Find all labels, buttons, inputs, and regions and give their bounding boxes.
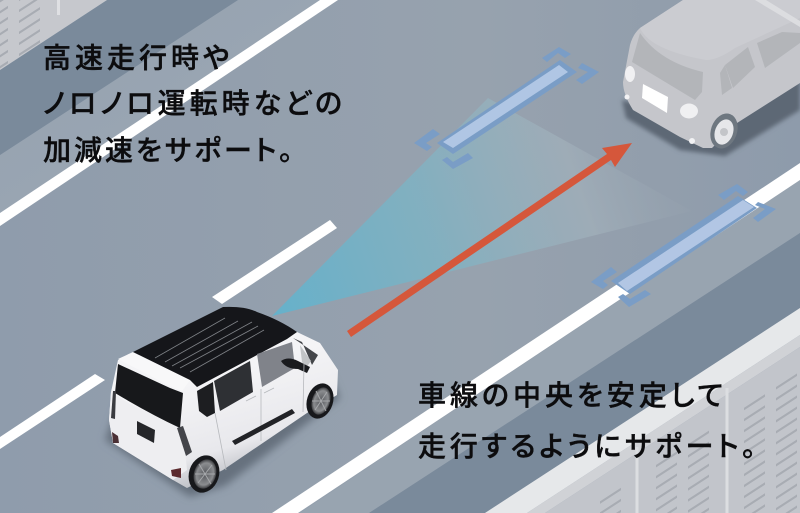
sensing cone bbox=[272, 98, 692, 316]
front wheel bbox=[302, 380, 338, 422]
roof ribs bbox=[155, 318, 264, 372]
lane marker: upper bbox=[414, 47, 599, 169]
red arrow bbox=[347, 143, 632, 337]
text: top-left caption: ノロノロ運転時などの bbox=[43, 88, 346, 119]
lower-right dark shoulder bbox=[369, 233, 800, 513]
rear window bbox=[115, 364, 183, 428]
white car bbox=[105, 307, 340, 497]
top-left wall bbox=[0, 0, 107, 70]
car shadow bbox=[105, 375, 340, 497]
door mirror bbox=[281, 358, 310, 373]
text: bottom-right caption: 走行するようにサポート。 bbox=[418, 431, 759, 462]
top-left lane line bbox=[0, 0, 338, 226]
text: bottom-right caption: 車線の中央を安定して bbox=[418, 380, 727, 411]
text: bottom-right caption bbox=[418, 380, 759, 462]
text: top-left caption: 加減速をサポート。 bbox=[43, 135, 296, 166]
black roof bbox=[133, 307, 297, 387]
lane marker: lower bbox=[591, 184, 776, 307]
top-left dark shoulder bbox=[0, 0, 238, 155]
side windows bbox=[197, 382, 215, 417]
text: top-left caption bbox=[43, 42, 346, 166]
white roof trim bbox=[118, 352, 190, 391]
tail lamps and plate bbox=[111, 391, 116, 419]
top-left road band bbox=[0, 0, 328, 213]
rear wheel bbox=[184, 451, 224, 497]
centre dashed lane lines bbox=[0, 220, 337, 449]
car body bbox=[109, 332, 338, 488]
side moulding bbox=[232, 409, 295, 445]
lower-right road band bbox=[300, 180, 800, 513]
right lane line bbox=[272, 163, 800, 513]
grey car ahead bbox=[622, 0, 800, 156]
door lines and handles bbox=[215, 364, 304, 470]
lower-right curb and wall bbox=[485, 308, 800, 513]
rear panel bbox=[109, 392, 187, 480]
text: top-left caption: 高速走行時や bbox=[43, 42, 233, 74]
